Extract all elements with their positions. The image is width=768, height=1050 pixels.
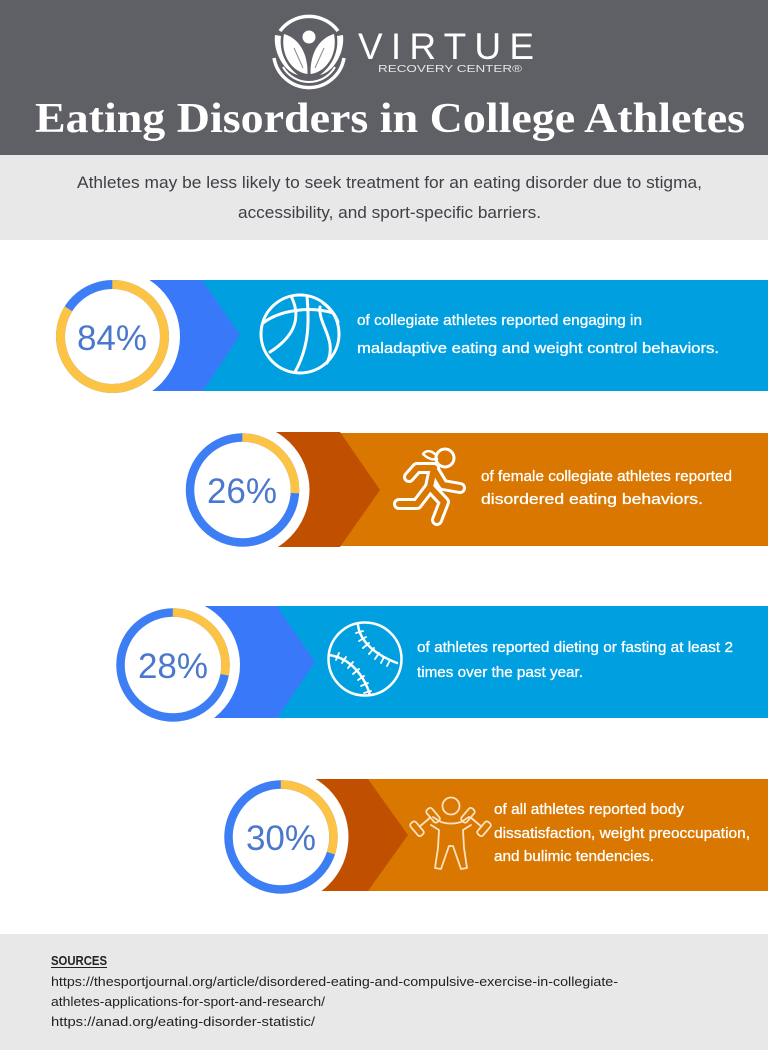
intro panel xyxy=(0,155,768,240)
sources list: https://anad.org/eating-disorder-statistic/ xyxy=(51,1014,315,1029)
donut chart 30% xyxy=(228,784,334,890)
icon: baseball xyxy=(328,622,402,696)
stat text: of female collegiate athletes reported xyxy=(481,468,732,485)
donut chart 26% xyxy=(190,438,295,542)
panel: stat 28% xyxy=(106,598,768,732)
icon: weightlifter xyxy=(409,798,492,869)
intro text: Athletes may be less likely to seek treatment for an eating disorder due to stigma, xyxy=(77,173,702,192)
icon: basketball xyxy=(261,295,339,373)
stat text: of athletes reported dieting or fasting at least 2 xyxy=(417,639,733,656)
sources list xyxy=(51,974,618,1029)
logo wordmark: VIRTUE xyxy=(358,26,534,67)
panel: stat 84% xyxy=(45,269,768,404)
stat text xyxy=(481,468,732,508)
stat text: maladaptive eating and weight control behaviors. xyxy=(357,340,719,357)
sources heading: SOURCES xyxy=(51,953,107,968)
title: Eating Disorders in College Athletes xyxy=(35,96,745,142)
panel: sources xyxy=(0,934,768,1050)
intro text: accessibility, and sport-specific barriers. xyxy=(238,203,541,222)
donut chart 28% xyxy=(120,612,226,718)
stat text xyxy=(417,639,733,681)
stat text: disordered eating behaviors. xyxy=(481,491,703,508)
panel: stat 30% xyxy=(214,770,768,904)
sources list: https://thesportjournal.org/article/disordered-eating-and-compulsive-exercise-in-collegiate- xyxy=(51,974,618,989)
sources list: athletes-applications-for-sport-and-research/ xyxy=(51,994,325,1009)
stat value: 26% xyxy=(207,472,277,511)
stat text: of collegiate athletes reported engaging in xyxy=(357,312,642,329)
intro text xyxy=(77,173,702,222)
stat text: of all athletes reported body xyxy=(494,801,685,818)
logo xyxy=(274,16,534,88)
icon: logo emblem xyxy=(274,16,344,88)
stat text: and bulimic tendencies. xyxy=(494,848,654,865)
stat text xyxy=(494,801,750,865)
stat text: times over the past year. xyxy=(417,664,583,681)
stat text: dissatisfaction, weight preoccupation, xyxy=(494,825,750,842)
stat value: 84% xyxy=(77,319,147,358)
stat value: 30% xyxy=(246,819,316,858)
logo tagline: RECOVERY CENTER® xyxy=(378,64,523,75)
icon: runner xyxy=(399,449,460,520)
panel: stat 26% xyxy=(176,423,768,557)
stat value: 28% xyxy=(138,647,208,686)
header panel xyxy=(0,0,768,155)
donut chart 84% xyxy=(60,284,164,388)
stat text xyxy=(357,312,719,357)
